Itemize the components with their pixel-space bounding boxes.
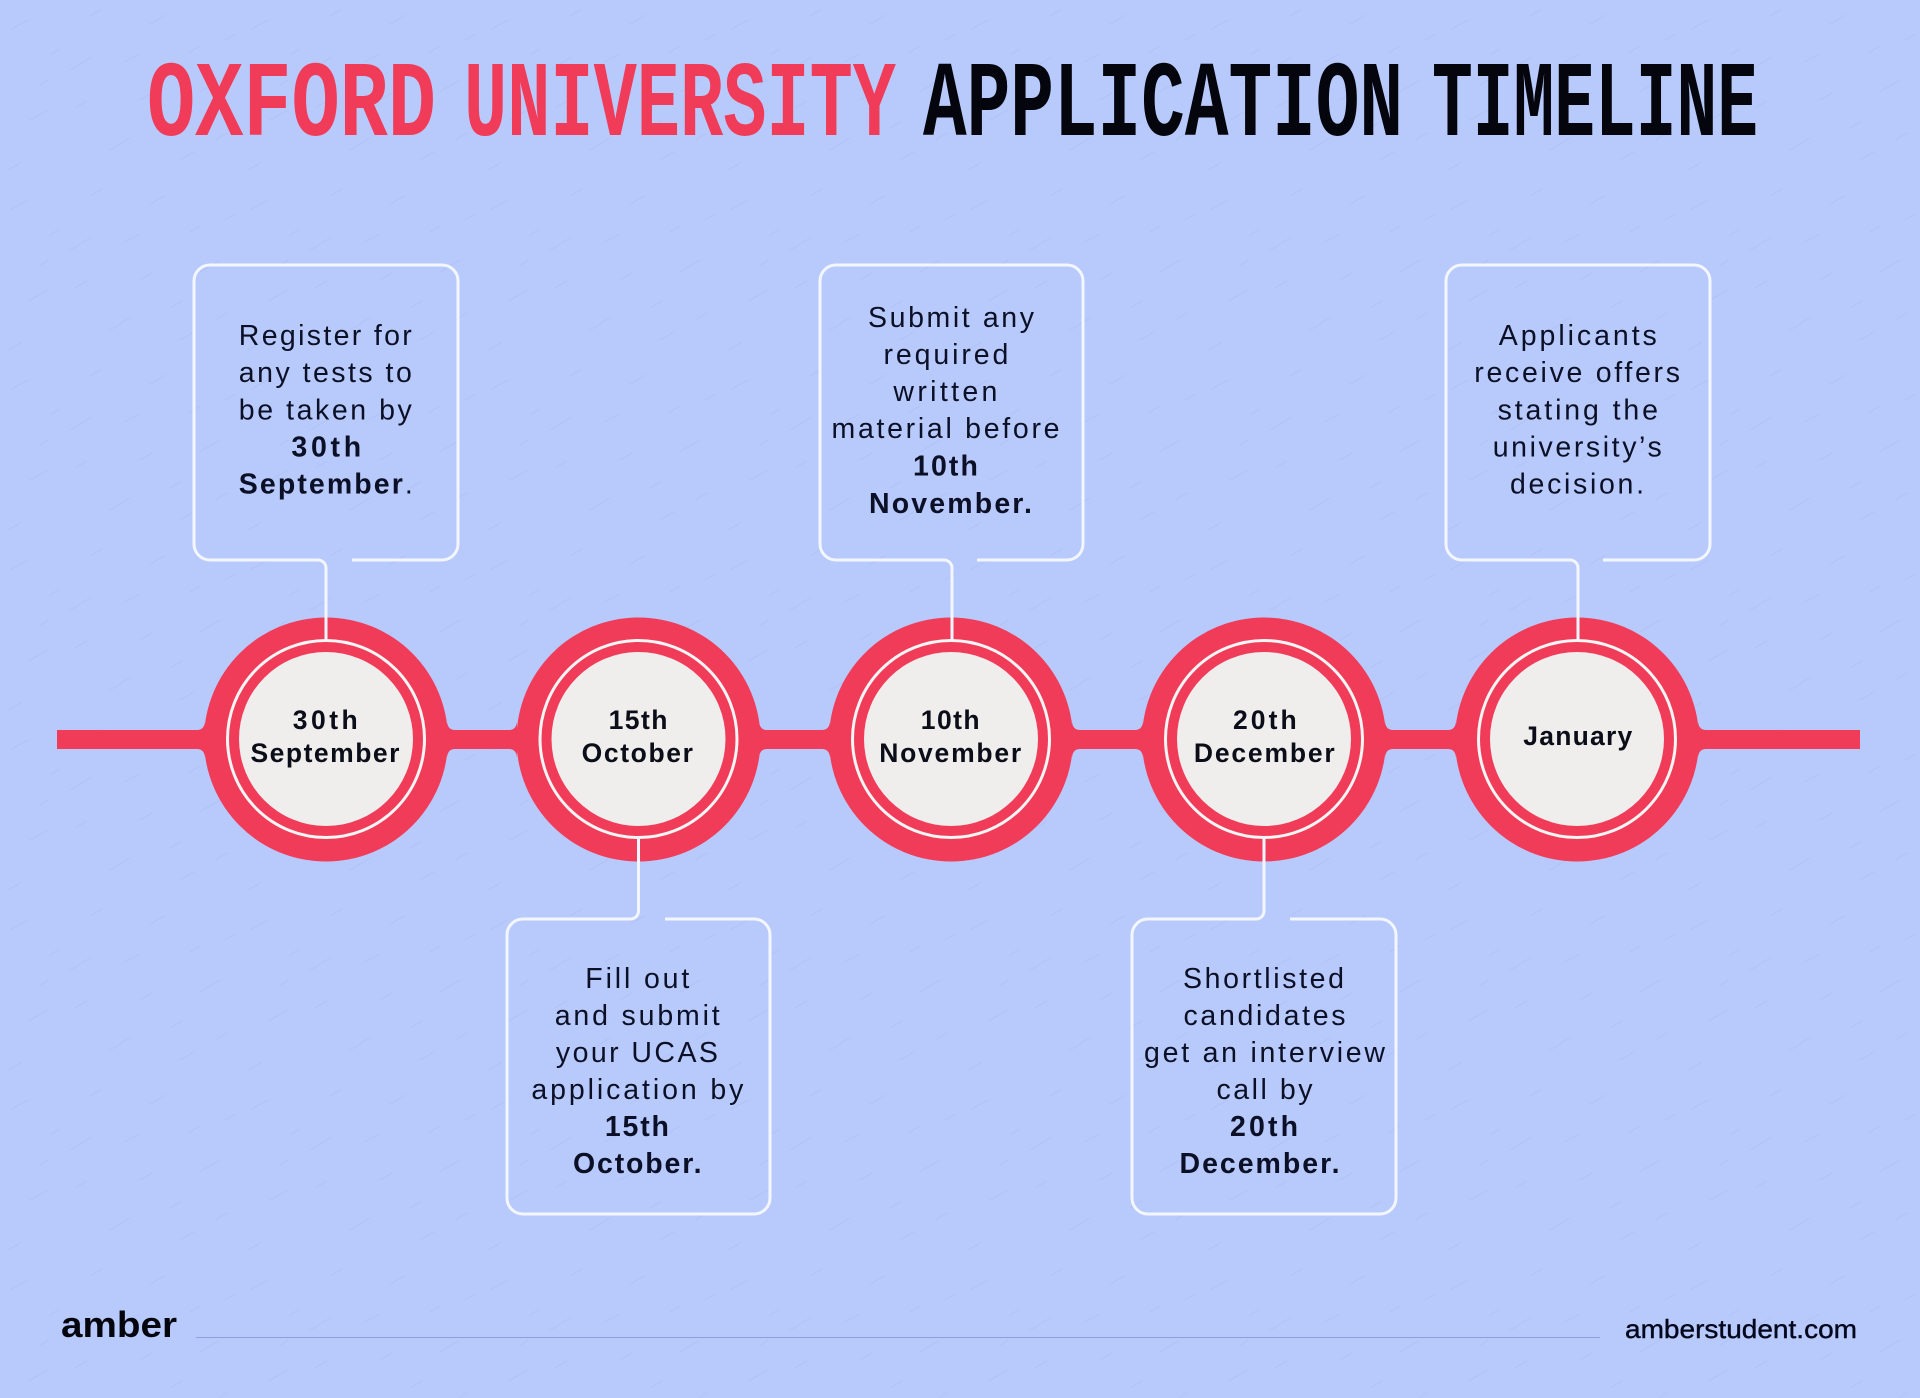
callout: applicants receive offers <box>1446 265 1710 640</box>
website: amberstudent.com <box>1625 1314 1857 1344</box>
logo: amber: amber <box>61 1304 177 1345</box>
node: 15th October: October <box>582 738 693 768</box>
callout: shortlisted candidates: candidates <box>1184 1000 1346 1032</box>
node: January: January <box>1523 721 1633 751</box>
callout: submit written material: Submit any <box>868 302 1035 334</box>
callout: UCAS application: October. <box>573 1148 702 1180</box>
callout: register for tests: September. <box>239 468 413 500</box>
node: 10th November: November <box>879 738 1021 768</box>
callout: UCAS application: and submit <box>555 1000 720 1032</box>
node: 20th December: December <box>1194 738 1335 768</box>
title: OXFORD <box>147 46 436 168</box>
callout: register for tests: be taken by <box>239 394 413 426</box>
node: 10th November <box>829 618 1073 862</box>
callout: UCAS application: Fill out <box>585 963 689 995</box>
callout: submit written material: November. <box>869 488 1032 520</box>
callout: submit written material: 10th <box>913 450 978 482</box>
callout: register for tests: Register for <box>239 320 412 352</box>
callout: applicants receive offers: receive offers <box>1474 357 1680 389</box>
callout: register for tests: 30th <box>291 432 361 464</box>
node: 30th September <box>204 618 448 862</box>
callout: UCAS application: your UCAS <box>556 1037 718 1069</box>
footer divider <box>196 1337 1600 1338</box>
title: APPLICATION <box>923 46 1403 168</box>
callout: applicants receive offers: Applicants <box>1499 320 1657 352</box>
callout: shortlisted candidates: Shortlisted <box>1183 963 1344 995</box>
callout: UCAS application: 15th <box>605 1111 669 1143</box>
callout: submit written material <box>820 265 1083 640</box>
callout: applicants receive offers: stating the <box>1498 394 1658 426</box>
callout: shortlisted candidates: get an interview <box>1144 1037 1385 1069</box>
callout: shortlisted candidates: 20th <box>1230 1111 1298 1143</box>
node: 15th October <box>516 618 760 862</box>
node: 30th September: 30th <box>293 705 358 735</box>
title: UNIVERSITY <box>464 46 896 168</box>
callout: register for tests <box>194 265 458 640</box>
callout: applicants receive offers: university’s <box>1493 432 1662 464</box>
node: 30th September: September <box>250 738 400 768</box>
callout: submit written material: required <box>884 339 1008 371</box>
callout: applicants receive offers: decision. <box>1510 468 1644 500</box>
node: 10th November: 10th <box>921 705 980 735</box>
title <box>147 46 1758 168</box>
callout: UCAS application: application by <box>531 1074 744 1106</box>
node: 20th December: 20th <box>1233 705 1297 735</box>
callout: UCAS application <box>507 838 770 1214</box>
callout: shortlisted candidates: call by <box>1216 1074 1313 1106</box>
node: 20th December <box>1142 618 1386 862</box>
callout: shortlisted candidates: December. <box>1180 1148 1340 1180</box>
node: January <box>1455 618 1699 862</box>
timeline bar <box>57 722 1860 757</box>
callout: register for tests: any tests to <box>239 357 412 389</box>
callout: shortlisted candidates <box>1132 838 1396 1214</box>
callout: submit written material: written <box>892 376 997 408</box>
node: 15th October: 15th <box>609 705 667 735</box>
callout: submit written material: material before <box>832 413 1060 445</box>
